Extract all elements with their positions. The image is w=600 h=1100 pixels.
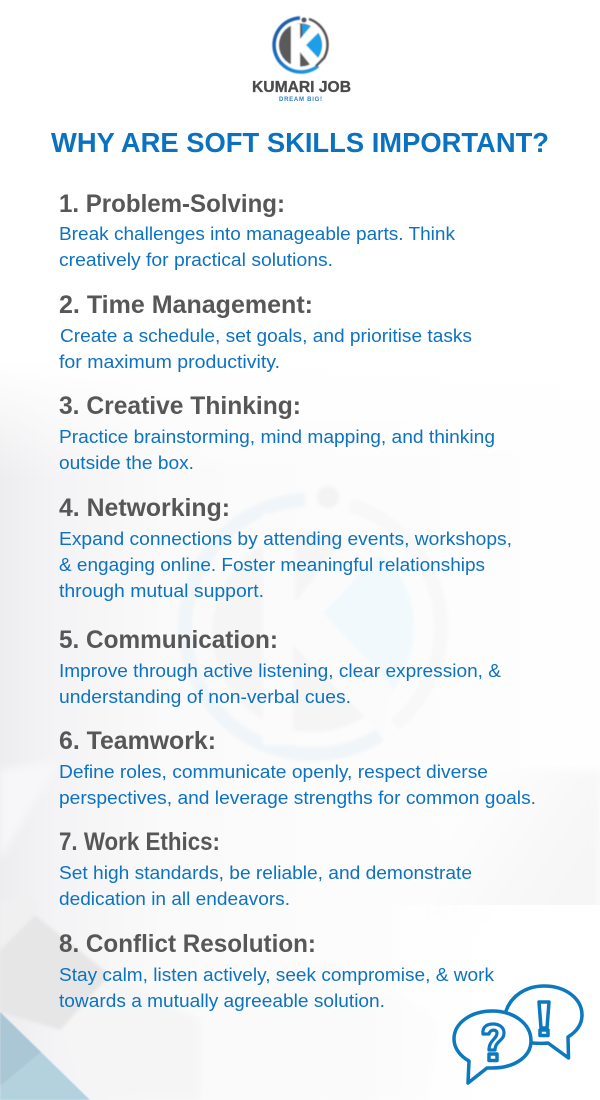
panel: teamwork xyxy=(59,727,536,808)
text block: dedication in all endeavors. xyxy=(59,889,290,909)
text block: Expand connections by attending events, workshops, xyxy=(59,529,512,549)
icon: exclamation bubble xyxy=(506,986,582,1058)
watermark: faded K logo xyxy=(185,486,441,754)
panel: networking xyxy=(59,494,512,601)
heading: 1. Problem-Solving: xyxy=(59,190,285,218)
heading: 8. Conflict Resolution: xyxy=(59,930,316,958)
text block xyxy=(59,529,512,601)
icon: speech bubbles xyxy=(454,986,582,1083)
heading: 7. Work Ethics: xyxy=(59,828,220,856)
logo mark xyxy=(274,18,328,72)
text block xyxy=(59,427,495,473)
text block: & engaging online. Foster meaningful relationships xyxy=(59,555,485,575)
text block xyxy=(59,224,456,270)
text block: creatively for practical solutions. xyxy=(59,250,333,270)
heading: 2. Time Management: xyxy=(59,291,313,319)
panel: communication xyxy=(59,626,501,707)
heading: 5. Communication: xyxy=(59,626,278,654)
text block: Set high standards, be reliable, and demonstrate xyxy=(59,863,472,883)
text block xyxy=(59,762,536,808)
logo tagline: DREAM BIG! xyxy=(279,97,322,103)
panel: conflict resolution xyxy=(59,930,495,1011)
icon: question bubble xyxy=(454,1011,531,1083)
text block xyxy=(59,965,495,1011)
title: WHY ARE SOFT SKILLS IMPORTANT? xyxy=(51,127,549,158)
text block: perspectives, and leverage strengths for common goals. xyxy=(59,788,536,808)
background: blue corner triangle xyxy=(0,1012,90,1100)
text block: Stay calm, listen actively, seek compromise, & work xyxy=(59,965,495,985)
text block: for maximum productivity. xyxy=(59,352,280,372)
logo: Kumari Job xyxy=(252,18,351,103)
text block: Practice brainstorming, mind mapping, and thinking xyxy=(59,427,495,447)
heading: 4. Networking: xyxy=(59,494,230,522)
heading: 3. Creative Thinking: xyxy=(59,392,301,420)
background: faded geometric pattern xyxy=(0,360,600,1100)
text block: outside the box. xyxy=(59,453,194,473)
text block: understanding of non-verbal cues. xyxy=(59,687,351,707)
text block: Improve through active listening, clear expression, & xyxy=(59,661,501,681)
text block: Create a schedule, set goals, and prioritise tasks xyxy=(60,326,472,346)
panel: problem-solving xyxy=(59,190,456,270)
text block xyxy=(59,326,472,372)
text block xyxy=(59,661,501,707)
text block: Define roles, communicate openly, respect diverse xyxy=(59,762,488,782)
text block: towards a mutually agreeable solution. xyxy=(59,991,385,1011)
logo wordmark: KUMARI JOB xyxy=(252,79,351,96)
panel: creative thinking xyxy=(59,392,495,473)
text block xyxy=(59,863,472,909)
text block: Break challenges into manageable parts. Think xyxy=(59,224,456,244)
panel: work ethics xyxy=(59,828,472,909)
panel: time management xyxy=(59,291,472,372)
heading: 6. Teamwork: xyxy=(59,727,216,755)
text block: through mutual support. xyxy=(59,581,264,601)
